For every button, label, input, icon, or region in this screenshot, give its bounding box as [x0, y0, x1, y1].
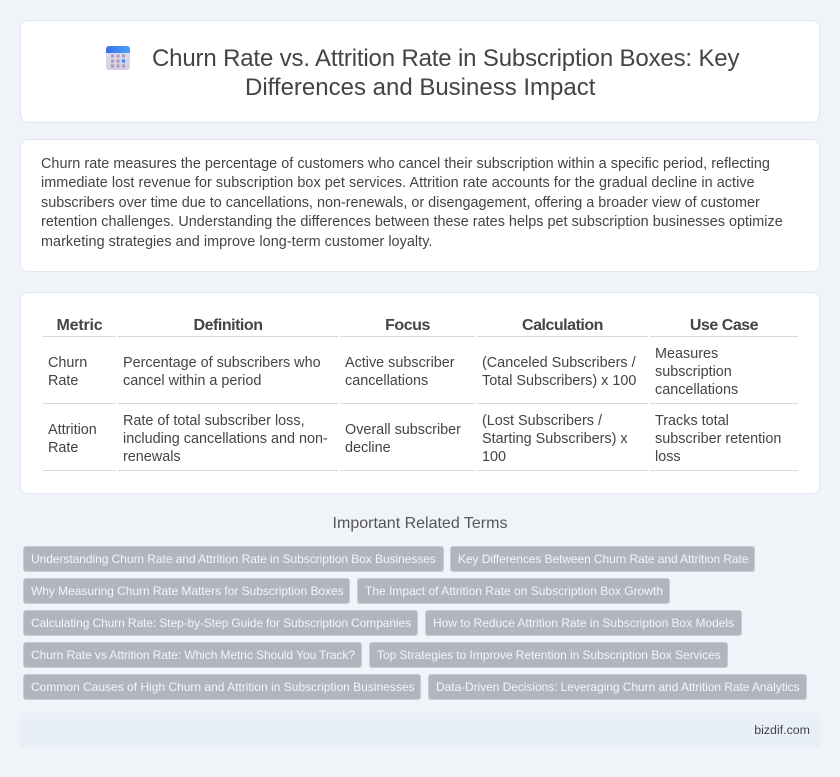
- row: attrition rate: Starting Subscribers) x: [482, 431, 628, 447]
- tag: Calculating Churn Rate: Step-by-Step Guide for Subscription Companies: [31, 616, 411, 630]
- title: [152, 45, 740, 101]
- row: attrition rate: [48, 413, 781, 465]
- row: churn rate: Active subscriber: [345, 355, 455, 371]
- table header: Definition: [194, 317, 262, 334]
- text block: introduction: immediate lost revenue for subscription box pet services. Attrition rate accounts for the gradual decline in active: [41, 175, 755, 191]
- row: churn rate: Total Subscribers) x 100: [482, 373, 636, 389]
- panel: introduction: [20, 139, 820, 272]
- row: churn rate: cancellations: [655, 382, 738, 398]
- text block: introduction: Churn rate measures the percentage of customers who cancel their subscription within a specific period, reflecting: [41, 156, 770, 172]
- row: attrition rate: renewals: [123, 449, 181, 465]
- tag: Top Strategies to Improve Retention in Subscription Box Services: [377, 648, 721, 662]
- row: attrition rate: Rate of total subscriber loss,: [123, 413, 305, 429]
- icon: calendar: [106, 46, 130, 70]
- table header: Use Case: [690, 317, 758, 334]
- row: attrition rate: decline: [345, 440, 391, 456]
- tag: [23, 642, 362, 668]
- tag: [450, 546, 755, 572]
- tag: Common Causes of High Churn and Attrition in Subscription Businesses: [31, 680, 415, 694]
- row: churn rate: cancellations: [345, 373, 428, 389]
- tag: [23, 546, 444, 572]
- text block: introduction: marketing strategies and improve long-term customer loyalty.: [41, 234, 432, 250]
- tag: The Impact of Attrition Rate on Subscription Box Growth: [365, 584, 663, 598]
- row: attrition rate: Overall subscriber: [345, 422, 461, 438]
- row: churn rate: Percentage of subscribers who: [123, 355, 321, 371]
- row: attrition rate: subscriber retention: [655, 431, 781, 447]
- table header: Calculation: [522, 317, 603, 334]
- heading: related terms: Important Related Terms: [333, 515, 507, 532]
- title: Differences and Business Impact: [245, 74, 595, 101]
- row: churn rate: Rate: [48, 373, 78, 389]
- tag: Understanding Churn Rate and Attrition Rate in Subscription Box Businesses: [31, 552, 436, 566]
- table: churn vs attrition: [43, 317, 798, 471]
- text block: introduction: subscribers over time due to cancellations, non-renewals, or disengagement, offering a broader view of customer: [41, 195, 760, 211]
- row: churn rate: (Canceled Subscribers /: [482, 355, 636, 371]
- tag: Data-Driven Decisions: Leveraging Churn and Attrition Rate Analytics: [436, 680, 799, 694]
- row: attrition rate: including cancellations and non-: [123, 431, 328, 447]
- tag: [357, 578, 670, 604]
- row: churn rate: Measures: [655, 346, 718, 362]
- row: churn rate: [48, 346, 738, 398]
- row: churn rate: cancel within a period: [123, 373, 261, 389]
- row: attrition rate: (Lost Subscribers /: [482, 413, 602, 429]
- row: attrition rate: Rate: [48, 440, 78, 456]
- tag: Churn Rate vs Attrition Rate: Which Metric Should You Track?: [31, 648, 355, 662]
- row: attrition rate: Tracks total: [655, 413, 729, 429]
- text block: introduction: retention challenges. Understanding the differences between these rates helps pet subscription businesses optimize: [41, 214, 783, 230]
- tag: How to Reduce Attrition Rate in Subscription Box Models: [433, 616, 734, 630]
- table header: [57, 317, 758, 334]
- footer bar: [20, 713, 820, 747]
- footer text: bizdif.com: [754, 723, 810, 737]
- table header: Metric: [57, 317, 102, 334]
- tag: Key Differences Between Churn Rate and Attrition Rate: [458, 552, 748, 566]
- table header: Focus: [385, 317, 430, 334]
- tag: [23, 674, 421, 700]
- row: churn rate: Churn: [48, 355, 87, 371]
- tag: [23, 610, 418, 636]
- tag: [425, 610, 742, 636]
- row: attrition rate: Attrition: [48, 422, 97, 438]
- tag: [369, 642, 728, 668]
- tag list: related terms: [23, 546, 807, 700]
- row: churn rate: subscription: [655, 364, 732, 380]
- tag: [428, 674, 807, 700]
- row: attrition rate: 100: [482, 449, 506, 465]
- title: Churn Rate vs. Attrition Rate in Subscription Boxes: Key: [152, 45, 739, 72]
- text block: introduction: [41, 156, 783, 250]
- tag: Why Measuring Churn Rate Matters for Subscription Boxes: [31, 584, 344, 598]
- panel: comparison table: [20, 292, 820, 494]
- tag: [23, 578, 350, 604]
- row: attrition rate: loss: [655, 449, 681, 465]
- panel: title card: [20, 20, 820, 123]
